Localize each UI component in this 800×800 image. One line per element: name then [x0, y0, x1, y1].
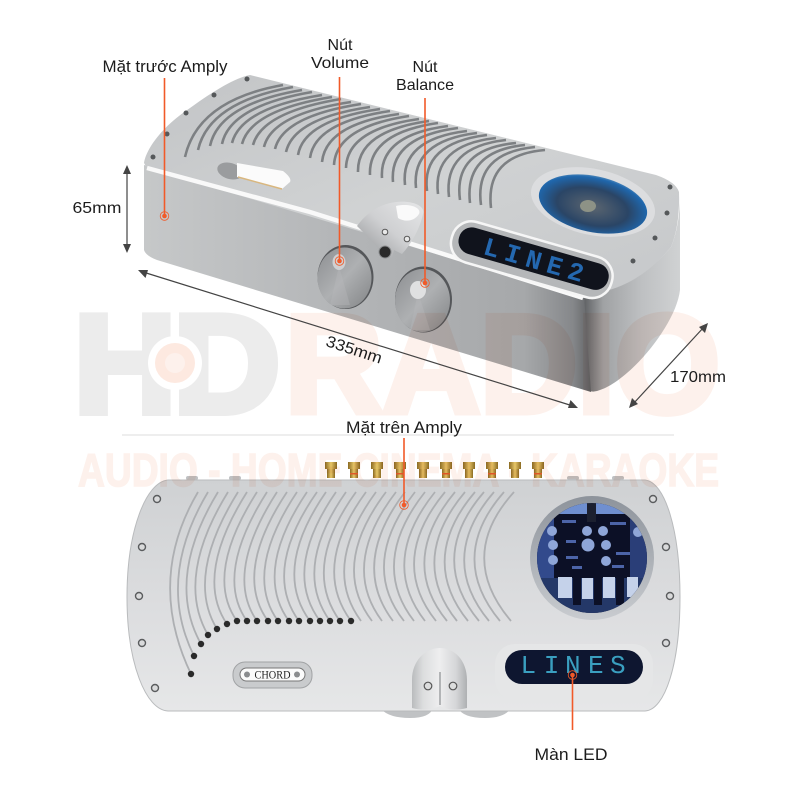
callout: nút volume: Nút — [328, 37, 353, 54]
amplifier: angled front view — [144, 75, 680, 392]
callout: mặt trên — [346, 419, 463, 509]
knob: volume — [318, 245, 374, 309]
front face — [144, 165, 591, 392]
callout: mặt trước — [102, 58, 228, 220]
logo badge: CHORD — [254, 670, 290, 682]
LED display — [495, 644, 653, 700]
callout: nút balance — [396, 59, 454, 287]
ventilation grooves — [185, 85, 545, 208]
centre mount — [357, 202, 423, 259]
callout: màn LED: Màn LED — [534, 746, 608, 764]
dots — [188, 618, 354, 677]
dimension: length 335mm — [138, 270, 578, 408]
circuit window — [530, 496, 655, 620]
callout: nút balance: Balance — [396, 77, 454, 94]
top surface — [144, 75, 679, 298]
target emblem — [148, 312, 202, 416]
knob: balance — [395, 266, 452, 332]
right side face — [584, 195, 680, 392]
LED text: LINES — [520, 651, 626, 681]
watermark — [74, 287, 720, 496]
dimension: height 65mm — [72, 165, 131, 253]
chassis — [127, 480, 680, 711]
callout: nút volume — [311, 37, 369, 265]
slot window — [215, 160, 290, 189]
rear connectors — [186, 462, 624, 480]
callout: nút volume: Volume — [311, 55, 369, 72]
callout: mặt trên: Mặt trên Amply — [346, 419, 463, 437]
HD letters — [74, 287, 280, 442]
ventilation grooves — [170, 492, 514, 674]
screws — [136, 496, 674, 692]
centre bridge — [412, 648, 467, 710]
callout: màn LED — [534, 671, 608, 764]
amplifier: top view — [127, 462, 680, 718]
callout: nút balance: Nút — [413, 59, 438, 76]
display text: LINE2 — [480, 233, 587, 290]
HD letters: D — [173, 287, 280, 442]
front edge highlight — [147, 168, 583, 298]
dimension: depth 170mm: 170mm — [670, 369, 726, 386]
dimension: length 335mm: 335mm — [324, 333, 384, 368]
screws on top — [150, 76, 672, 264]
divider — [122, 434, 674, 436]
glass window — [525, 157, 661, 247]
HD letters: H — [74, 287, 176, 442]
RADIO letters: RADIO — [285, 287, 720, 442]
dimension: depth 170mm — [629, 323, 726, 408]
logo badge — [233, 662, 312, 688]
feet — [380, 708, 433, 718]
display recess — [446, 217, 617, 303]
dark display — [455, 224, 612, 293]
dimension: height 65mm: 65mm — [72, 200, 122, 217]
callout: mặt trước: Mặt trước Amply — [102, 58, 228, 76]
feet right — [458, 708, 511, 718]
